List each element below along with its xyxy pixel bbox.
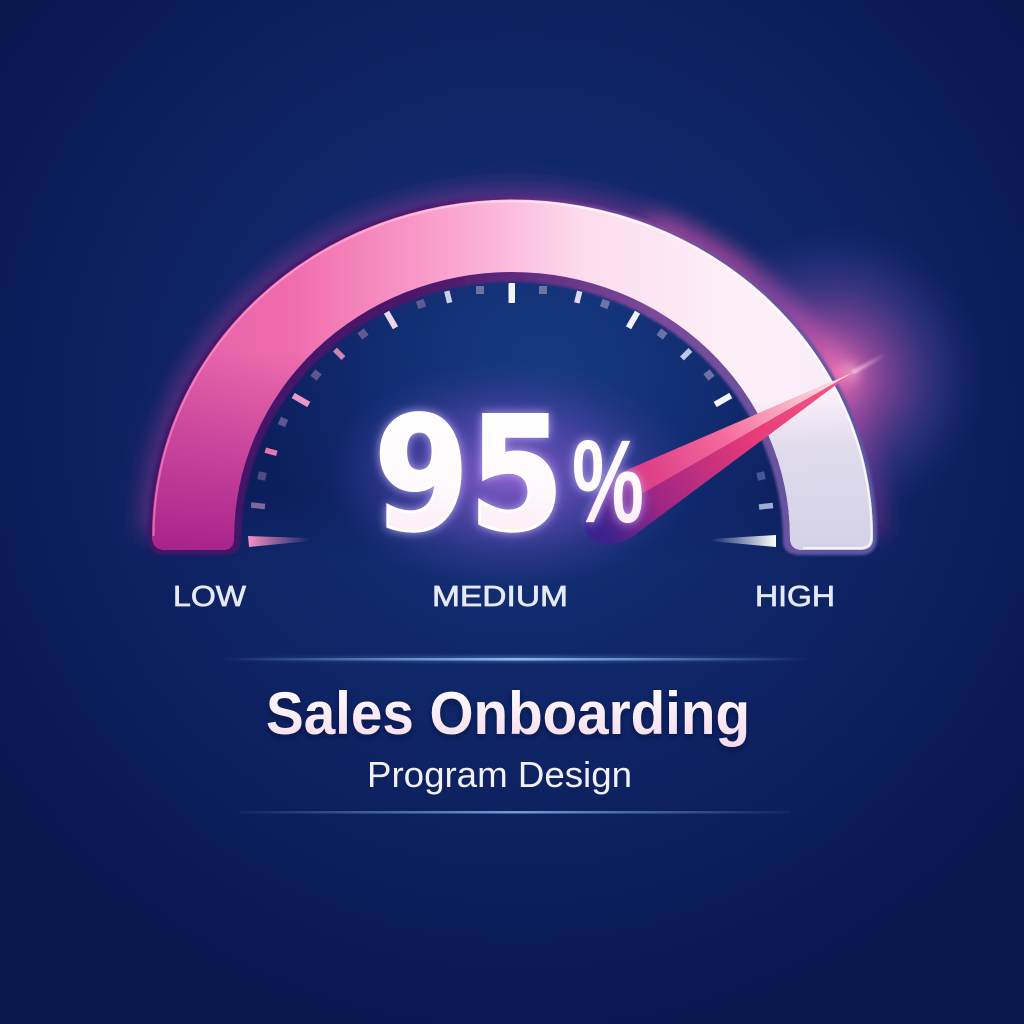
subtitle: Program Design — [367, 754, 632, 795]
label: low: LOW — [173, 581, 247, 613]
title: Sales Onboarding — [266, 680, 750, 747]
glow: arc halo — [152, 200, 873, 536]
needle — [584, 354, 886, 545]
glow behind percentage — [325, 360, 695, 590]
label: high: HIGH — [755, 581, 835, 613]
percentage value: % — [572, 416, 644, 548]
glow: pink halo on upper right of arc — [650, 224, 850, 385]
divider: lower — [240, 811, 790, 814]
tick marks — [248, 283, 776, 547]
gauge — [140, 197, 985, 590]
gauge rim shadow — [148, 197, 877, 555]
label: medium: MEDIUM — [432, 581, 568, 613]
gauge inner well — [244, 364, 779, 520]
divider: upper — [220, 656, 810, 662]
percentage value: 95 — [374, 384, 564, 567]
gauge arc band — [140, 200, 880, 555]
scale labels — [173, 581, 835, 613]
glow: flare behind needle tip — [685, 225, 985, 525]
